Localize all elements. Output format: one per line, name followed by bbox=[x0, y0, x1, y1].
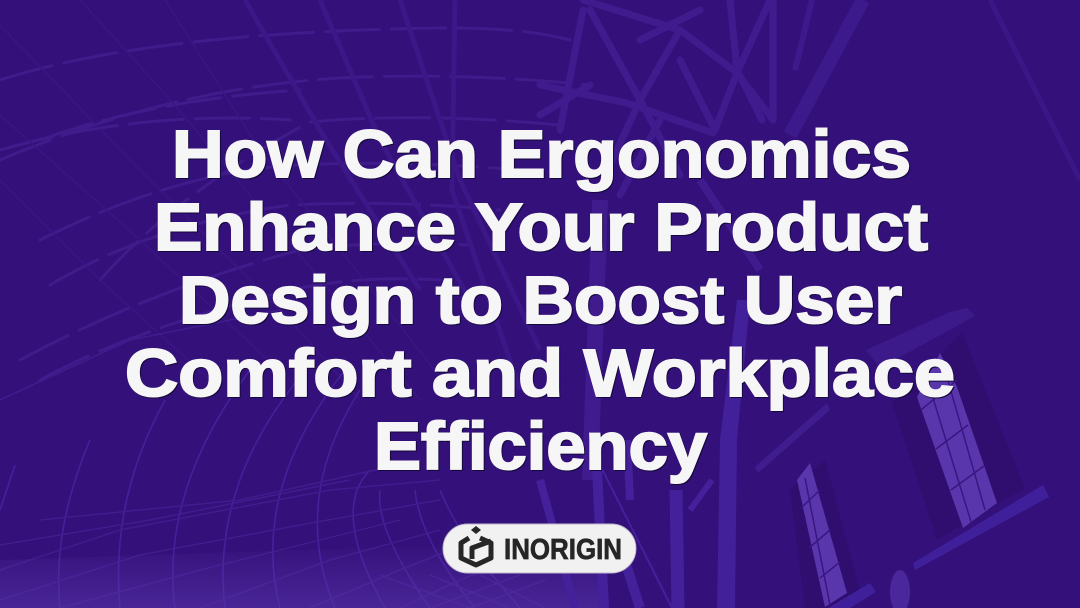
title: Design to Boost User bbox=[179, 263, 902, 338]
title: Enhance Your Product bbox=[154, 190, 928, 265]
light at base of dome bbox=[0, 540, 600, 608]
icon: lit window right bbox=[917, 353, 997, 528]
icon: inorigin hexagon mark bbox=[461, 526, 491, 565]
icon: lintel right bbox=[866, 308, 975, 368]
title: Comfort and Workplace bbox=[125, 336, 955, 411]
logo badge bbox=[443, 524, 636, 573]
icon: dark window recess left bbox=[790, 460, 860, 608]
icon: sill right bbox=[913, 485, 1049, 570]
roof struts upper centre bbox=[540, 0, 773, 195]
structural bands lower centre bbox=[540, 440, 712, 608]
icon: sill left bbox=[828, 583, 876, 608]
title: How Can Ergonomics bbox=[172, 117, 911, 192]
icon: lintel left bbox=[755, 403, 830, 473]
icon: light glow at base of wall bbox=[890, 570, 910, 608]
logo wordmark: INORIGIN bbox=[504, 534, 622, 566]
icon: vertical pillar bbox=[717, 300, 750, 608]
title: Efficiency bbox=[374, 409, 707, 484]
title bbox=[125, 117, 955, 484]
icon: dark window recess right bbox=[892, 332, 1025, 540]
dome ribs lower left bbox=[0, 365, 520, 608]
icon: lit window left bbox=[797, 463, 847, 607]
